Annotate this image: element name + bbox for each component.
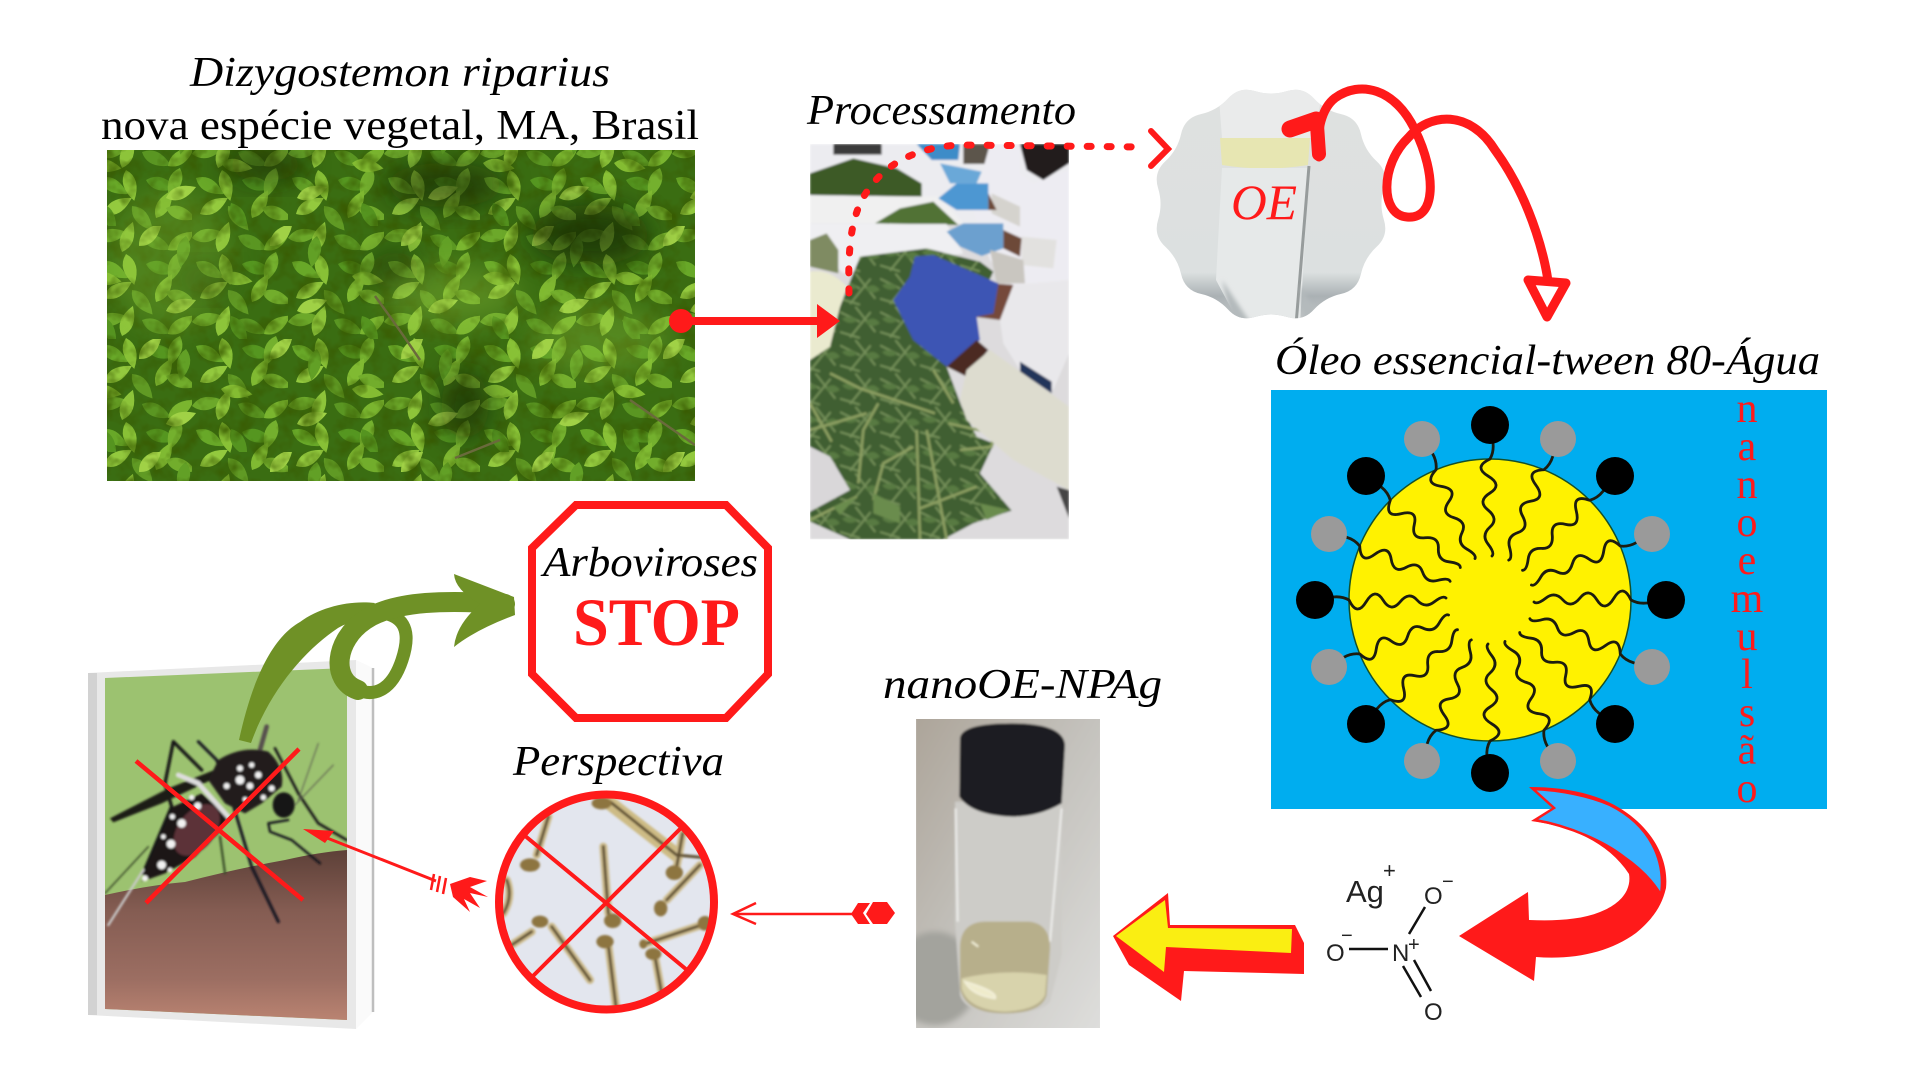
arrow: larvae to mosquito [303, 829, 488, 912]
vertical label: nanoemulsão: s [1739, 690, 1755, 736]
text: STOP: STOP [573, 584, 740, 660]
arrow: curved blue and red [1459, 787, 1666, 981]
chemical structure: silver nitrate: + [1383, 858, 1396, 883]
chemical structure: silver nitrate: N [1392, 940, 1409, 967]
text: Arboviroses: Arboviroses [540, 540, 758, 586]
vertical label: nanoemulsão: m [1731, 576, 1764, 622]
chemical structure: silver nitrate: O [1424, 999, 1443, 1026]
title: species [101, 50, 699, 149]
mosquito photo [105, 665, 350, 1025]
chemical structure: silver nitrate [1326, 858, 1454, 1026]
heading: nanoOE-NPAg: nanoOE-NPAg [883, 662, 1162, 708]
red cross [136, 749, 303, 903]
chemical structure: silver nitrate: + [1408, 934, 1420, 956]
chemical structure: silver nitrate: − [1442, 871, 1454, 893]
micelle core [1349, 459, 1631, 741]
vertical label: nanoemulsão: n [1736, 462, 1758, 508]
arrow: dotted to essential oil [849, 131, 1168, 293]
photo: laboratory processing [810, 144, 1069, 539]
arrow: green curl to stop sign [239, 574, 515, 743]
surfactant tails [1333, 443, 1647, 757]
vertical label: nanoemulsão: a [1738, 424, 1757, 470]
larvae prohibition circle [495, 790, 719, 1014]
heading: emulsion: Óleo essencial-tween 80-Água [1275, 337, 1820, 384]
arrow: yellow block [1113, 893, 1304, 1001]
title: species: Dizygostemon riparius [189, 50, 610, 96]
arrow: curly red [1290, 89, 1566, 317]
book cover [88, 660, 356, 1029]
vertical label: nanoemulsão: n [1736, 386, 1758, 432]
title: species: nova espécie vegetal, MA, Brasil [101, 103, 699, 149]
book with mosquito [88, 660, 373, 1029]
vertical label: nanoemulsão: e [1738, 538, 1756, 584]
vertical label: nanoemulsão: l [1741, 652, 1753, 698]
photo: plant foliage [107, 149, 695, 481]
vertical label: nanoemulsão: o [1736, 500, 1758, 546]
vertical label: nanoemulsão [1731, 386, 1764, 812]
stop sign [532, 505, 768, 718]
chemical structure: silver nitrate: Ag [1346, 874, 1384, 909]
arrow: plant to processing [669, 304, 840, 338]
label: OE: OE [1231, 174, 1297, 230]
vertical label: nanoemulsão: ã [1738, 728, 1757, 774]
chemical structure: silver nitrate: − [1341, 925, 1353, 947]
chemical structure: silver nitrate: O [1424, 883, 1443, 910]
photo: vial [916, 719, 1100, 1028]
chemical structure: silver nitrate: O [1326, 940, 1345, 967]
red circle with cross [499, 794, 714, 1010]
vertical label: nanoemulsão: u [1736, 614, 1758, 660]
surfactant heads [1296, 406, 1685, 792]
essential oil scalloped photo [1150, 85, 1390, 325]
heading: Processamento: Processamento [806, 88, 1076, 134]
panel: nanoemulsion micelle [1271, 386, 1827, 812]
vertical label: nanoemulsão: o [1736, 766, 1758, 812]
arrow: vial to larvae [733, 902, 895, 924]
heading: Perspectiva: Perspectiva [512, 739, 724, 785]
